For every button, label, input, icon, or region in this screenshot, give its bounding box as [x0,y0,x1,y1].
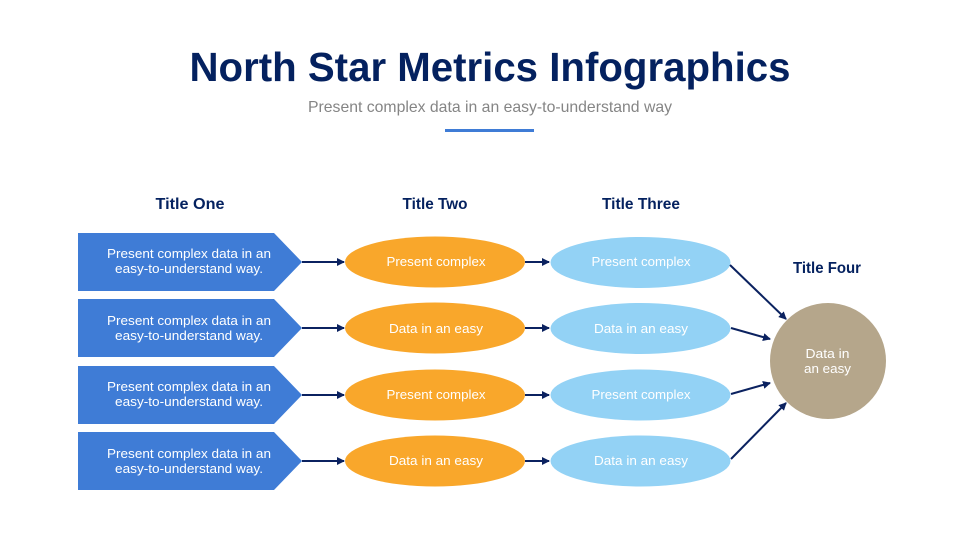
row 1 orange ellipse: Present complex [386,254,486,269]
arrows: pentagons to orange ellipses [302,262,344,461]
row 3 blue ellipse: Present complex [592,387,691,402]
row 1 orange ellipse [345,236,525,288]
row 4 pentagon [78,432,302,490]
row 4 blue ellipse: Data in an easy [594,453,689,468]
heading: title two: Title Two [402,196,468,213]
row 2 orange ellipse: Data in an easy [389,321,484,336]
row 3 pentagon: easy-to-understand way. [115,394,263,409]
row 3 blue ellipse [550,370,730,420]
title underline [445,129,534,132]
row 2 pentagon: easy-to-understand way. [115,328,263,343]
tan circle: an easy [804,361,852,376]
heading: title one: Title One [156,196,225,213]
row 1 pentagon [78,233,302,291]
row 2 blue ellipse [550,303,730,354]
row 2 orange ellipse [345,302,525,354]
row 1 blue ellipse [550,237,730,288]
arrows: blue ellipses to circle [730,265,786,459]
heading: title three: Title Three [602,196,680,213]
row 4 pentagon: easy-to-understand way. [115,461,263,476]
row 1 blue ellipse: Present complex [592,254,691,269]
row 4 pentagon: Present complex data in an [107,446,271,461]
row 3 pentagon: Present complex data in an [107,379,271,394]
arrows: orange to blue ellipses [525,262,549,461]
subtitle: Present complex data in an easy-to-understand way [308,99,672,116]
row 3 orange ellipse [345,370,525,420]
row 1 pentagon: easy-to-understand way. [115,261,263,276]
title: North Star Metrics Infographics [190,44,790,90]
row 3 pentagon [78,366,302,424]
row 4 orange ellipse: Data in an easy [389,453,484,468]
row 2 blue ellipse: Data in an easy [594,321,689,336]
tan circle [770,303,886,419]
heading: title four: Title Four [793,260,861,277]
row 2 pentagon [78,299,302,357]
row 2 pentagon: Present complex data in an [107,313,271,328]
row 4 blue ellipse [550,436,730,486]
row 3 orange ellipse: Present complex [386,387,486,402]
row 1 pentagon: Present complex data in an [107,246,271,261]
tan circle: Data in [806,346,850,361]
row 4 orange ellipse [345,436,525,486]
